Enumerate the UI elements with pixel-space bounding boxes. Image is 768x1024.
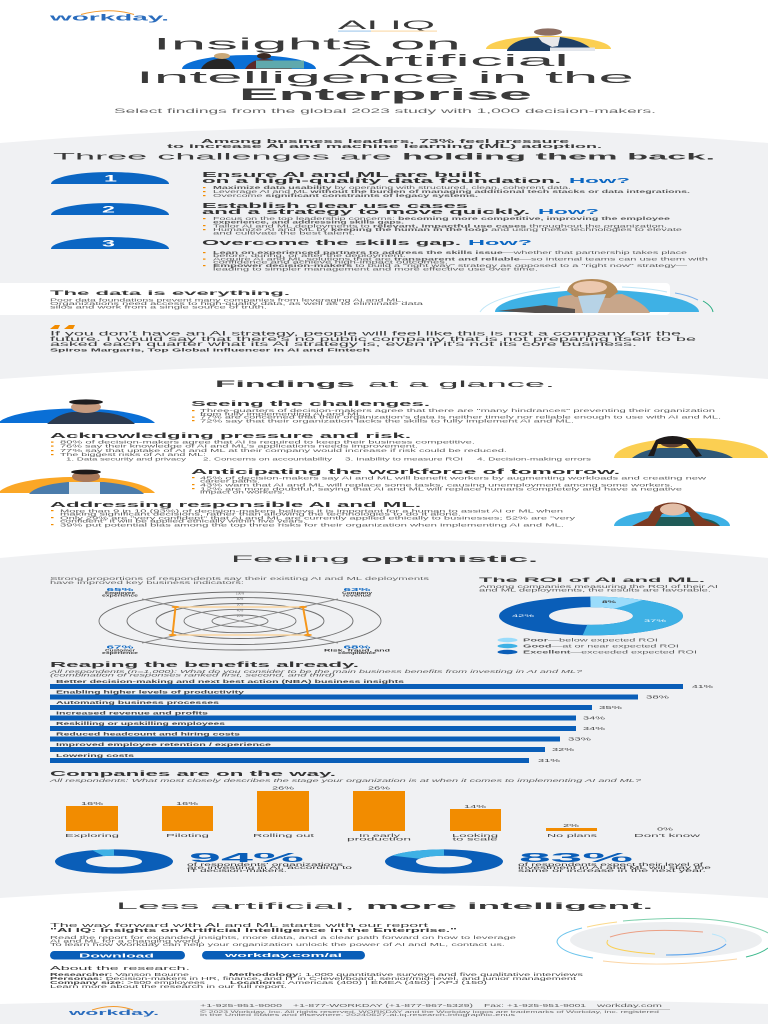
bar: automating processes (50, 700, 622, 710)
legend: ROI: Excellent —exceeded expected ROI (523, 650, 697, 654)
legend: ROI (498, 638, 697, 654)
finding: acknowledging pressure and risk: 77% say that uptake of AI and ML at their company would increase if risk could be reduced. (60, 448, 507, 453)
bar: reduced headcount (50, 732, 591, 742)
photo: red-haired woman on light blue arc (614, 502, 730, 526)
radar chart: 100% (236, 592, 244, 596)
attribution: Spiros Margaris, Top Global Influencer in AI and Fintech (50, 348, 371, 352)
column chart: implementation stage: Exploring (65, 833, 120, 838)
legend: ROI: Good —at or near expected ROI (523, 644, 679, 648)
body text: data foundations: Organizations need access to high-quality data, as well as to eliminate data (50, 301, 425, 306)
heading: reaping the benefits: (combination of responses ranked first, second, and third) (50, 672, 336, 678)
finding: seeing the challenges (191, 401, 721, 423)
finding: anticipating the workforce: 45% of decision-makers say AI and ML will benefit workers by augmenting workloads and creating new (200, 475, 708, 480)
bar: automating processes: Automating business processes (56, 700, 220, 705)
bar: higher productivity: Enabling higher levels of productivity (56, 690, 245, 694)
photo: man in denim on orange arc (0, 470, 155, 494)
column chart: implementation stage: No plans (547, 833, 599, 838)
stat: 94 percent: of respondents' organizations (187, 862, 343, 867)
bar: revenue and profits: Increased revenue and profits (56, 710, 209, 716)
challenge 2: and cultivate the best talent. (213, 230, 355, 236)
panel: the data is everything (0, 279, 713, 315)
bar: employee retention (50, 742, 574, 752)
radar chart: 20% (237, 614, 243, 618)
stat: 94 percent: are investing in AI, according to (187, 865, 354, 870)
heading: findings at a glance: at a glance. (368, 379, 555, 390)
radar label: customer experience: experience (102, 651, 138, 655)
finding: anticipating the workforce: impact on workers. (200, 490, 285, 495)
bar: reduced headcount: Reduced headcount and hiring costs (56, 732, 241, 736)
finding: anticipating the workforce (191, 469, 708, 495)
column chart: implementation stage: In early (359, 833, 402, 838)
challenge 3: confidence and achieve high-impact outcomes. (213, 260, 448, 264)
ROI heading and text (479, 577, 718, 592)
about the research: About the research. (50, 966, 190, 972)
about the research: Locations: Americas (400) | EMEA (450) | APJ (150) (230, 980, 488, 985)
photo: woman with tablet on blue arc with rings (480, 279, 713, 313)
heading: companies are on the way (47, 771, 643, 783)
photo: man with crossed arms on blue arc (0, 399, 155, 424)
badge 1: 1 (104, 174, 117, 184)
quote text (50, 332, 698, 348)
footer contact line: +1-877-WORKDAY (+1-877-967-5329) (293, 1003, 474, 1008)
intro statement (167, 139, 604, 150)
stat: 94 percent (187, 850, 354, 873)
radar label: employee experience: 65% (106, 587, 134, 592)
heading: findings at a glance (215, 379, 555, 390)
footer legal text: © 2023 Workday, Inc. All rights reserved. WORKDAY and the Workday logos are trademarks of Workday, Inc. registered (200, 1010, 659, 1014)
finding: addressing responsible AI: Only 29% are "very confident" that AI and ML are currently applied ethically to businesses; 52% are "very (60, 515, 577, 520)
donut: 94 percent (70, 853, 158, 870)
challenge 3: How? (468, 238, 534, 247)
bar: revenue and profits (50, 710, 605, 720)
bar: employee retention: Improved employee retention / experience (56, 742, 272, 747)
footer contact line: +1-925-951-9000 (200, 1003, 284, 1008)
finding: seeing the challenges: 77% are concerned that their organization's data is neither timely nor reliable enough to use with AI and ML. (200, 415, 721, 420)
photo: woman with braids on yellow arc (614, 436, 768, 458)
finding: acknowledging pressure and risk (50, 433, 591, 462)
finding: acknowledging pressure and risk: 80% of decision-makers agree that AI is required to keep their business competitive. (60, 440, 475, 444)
challenge 1: Ensure AI and ML are built (202, 170, 483, 179)
bar chart: benefits (50, 679, 713, 763)
finding: acknowledging pressure and risk: 3. Inability to measure ROI (345, 456, 463, 462)
finding: acknowledging pressure and risk: 1. Data security and privacy (66, 456, 188, 462)
quote text: future. I would say that there's no public company that is not preparing itself to be (50, 337, 698, 343)
button: workday.com/ai (202, 951, 365, 960)
finding: acknowledging pressure and risk: 2. Concerns on accountability (203, 456, 334, 462)
button: workday.com/ai: workday.com/ai (222, 953, 343, 959)
body text: data foundations (50, 298, 425, 309)
radar chart: 80% (237, 597, 243, 601)
bar: reskilling: Reskilling or upskilling employees (56, 721, 226, 726)
radar label: risk fraud compliance: compliance (338, 651, 376, 655)
title block (136, 18, 634, 104)
legend: ROI: Poor —below expected ROI (523, 638, 658, 642)
column chart: implementation stage: 26% (272, 786, 294, 790)
about the research: Learn more about the research in our full report. (50, 984, 287, 989)
body text: data foundations: silos and work from a single source of truth. (50, 304, 267, 309)
button: download: Download (79, 953, 154, 959)
intro statement: Among business leaders, 73% feel pressure (201, 139, 569, 145)
subtitle: Select findings from the global 2023 study with 1,000 decision-makers. (114, 108, 657, 115)
column chart: implementation stage: to scale (452, 836, 499, 842)
heading: reaping the benefits (47, 662, 584, 678)
challenge 2: and a strategy to move quickly. (202, 207, 530, 216)
heading: the data is everything: The data is everything. (50, 290, 290, 297)
challenge 2: Tailor AI and ML deployments to relevant, impactful use cases throughout the organization. (213, 224, 667, 228)
radar label: customer experience: 67% (106, 644, 134, 650)
finding: addressing responsible AI (50, 502, 577, 528)
quote text: asked each quarter what its AI strategy is, even if it's not its core business. (50, 342, 638, 348)
donut chart: ROI (512, 599, 667, 630)
column chart: implementation stage: 16% (81, 801, 103, 806)
call to action text: The way forward with AI and ML starts with our report (50, 923, 430, 929)
logo: workday (47, 11, 169, 24)
call to action text: "AI IQ: Insights on Artificial Intelligence in the Enterprise." (50, 928, 458, 934)
title block: Intelligence in the (136, 69, 634, 87)
title block: Enterprise (239, 86, 532, 104)
radar label: employee experience: Employee (105, 591, 135, 595)
column chart: implementation stage: 2% (563, 823, 579, 828)
photo: man with tablet on yellow arc (486, 28, 611, 51)
radar chart (99, 587, 390, 655)
heading: companies are on the way: Companies are on the way. (50, 771, 336, 778)
heading: reaping the benefits: Reaping the benefits already. (50, 662, 359, 669)
radar label: risk fraud compliance: 68% (344, 644, 371, 650)
bar: reduced headcount: 33% (568, 736, 591, 742)
call to action text: To learn how Workday can help your organization unlock the power of AI and ML, contact us. (50, 942, 505, 947)
button: download (50, 951, 185, 960)
challenge 3: before, during, or after the deployment. (213, 253, 406, 258)
heading: companies are on the way: All respondents: What most closely describes the stage your organization is at when it comes to implementing AI and ML? (47, 778, 643, 783)
bar: higher productivity: 38% (646, 694, 669, 700)
column chart: implementation stage: Don't know (634, 833, 702, 838)
radar label: employee experience (102, 587, 138, 598)
bar: lowering costs (50, 753, 560, 763)
heading: feeling optimistic: Feeling (231, 554, 350, 565)
donut chart: ROI: 8% (602, 599, 617, 604)
donut chart: ROI: 37% (644, 618, 667, 623)
title block: Insights on (153, 36, 461, 54)
stat: 83 percent: 83% (519, 850, 635, 865)
column chart: implementation stage: production (347, 836, 412, 842)
footer contact line: Fax: +1-925-951-9001 (484, 1003, 587, 1008)
call to action text: AI and ML for a changing world. (50, 938, 203, 943)
bar: higher productivity (50, 690, 669, 700)
radar label: customer experience (102, 644, 138, 655)
column chart: implementation stage: 0% (657, 826, 673, 832)
challenge 2 (202, 201, 684, 236)
challenge 2: How? (538, 207, 600, 216)
challenge 3: Acquire AI and ML solutions that are transparent and reliable —so internal teams can use them with (213, 256, 710, 262)
heading: three challenges: Three challenges are (53, 152, 392, 162)
challenge 1: How? (569, 176, 631, 185)
finding: addressing responsible AI: More than 9 in 10 (93%) of decision-makers believe it is important for a human to assist AI or ML when (60, 508, 565, 513)
ROI heading and text: and ML deployments, the results are favorable. (479, 587, 711, 592)
bar: employee retention: 32% (552, 747, 574, 752)
challenge 2: experience, and addressing skills gaps. (213, 220, 404, 224)
bar: better decision-making (50, 679, 713, 689)
challenge 1: Overcome significant constraints of legacy systems. (213, 193, 478, 198)
bar: revenue and profits: 34% (583, 716, 605, 720)
challenge 2: Establish clear use cases (202, 201, 468, 210)
heading: less artificial more intelligent (116, 901, 653, 912)
stat: 83 percent: same or increase in the next year. (518, 868, 706, 873)
bar: better decision-making: Better decision-making and next best action (NBA) business insights (56, 679, 405, 684)
call to action text (50, 923, 518, 947)
logo: workday: workday. (47, 12, 169, 24)
photo: two colleagues with laptop on blue arc (182, 53, 316, 69)
bar: lowering costs: 31% (538, 758, 560, 763)
footer contact line: workday.com (597, 1003, 663, 1008)
finding: seeing the challenges: Seeing the challenges. (191, 401, 430, 408)
column chart: implementation stage: Looking (452, 833, 499, 838)
heading: feeling optimistic: optimistic. (361, 554, 538, 565)
radar label: customer experience: Customer (105, 648, 136, 652)
radar chart: 60% (237, 602, 243, 606)
radar chart intro text: Strong proportions of respondents say their existing AI and ML deployments (50, 576, 430, 582)
challenge 3: leading to simpler management and more effective use over time. (213, 266, 538, 272)
radar label: risk fraud compliance (324, 644, 390, 655)
column chart: implementation stage: Rolling out (253, 833, 316, 838)
quote (50, 325, 698, 352)
badge 1 (51, 172, 169, 184)
donut: 83 percent (400, 853, 488, 870)
finding: acknowledging pressure and risk: Acknowledging pressure and risk. (50, 433, 411, 440)
heading: findings at a glance: Findings (215, 379, 355, 390)
stat: 83 percent: investment in AI and ML will stay the (518, 865, 713, 870)
stat: 83 percent: of respondents expect their level of (518, 862, 705, 867)
stat: 94 percent: 94% (189, 850, 306, 865)
finding: seeing the challenges: Three-quarters of decision-makers agree that there are "many hindrances" preventing their organization (200, 408, 717, 413)
radar label: company revenue: Company (342, 591, 372, 595)
finding: seeing the challenges: from fully implementing AI and ML. (200, 411, 365, 416)
challenge 3: Lean on experienced partners to address the skills issue —whether that partnership takes place (213, 250, 688, 255)
challenge 1: Maximize data usability by operating with structured, clean, coherent data. (213, 185, 571, 190)
heading: three challenges (53, 152, 715, 162)
body text: data foundations: Poor data foundations prevent many companies from leveraging AI and ML. (50, 298, 404, 303)
bar: reskilling: 34% (583, 726, 605, 731)
heading: reaping the benefits: All respondents (n=1,000): What do you consider to be the main business benefits from investing in AI and ML? (47, 669, 584, 674)
challenge 1 (202, 170, 690, 198)
column chart: implementation stage (65, 786, 702, 842)
radar chart intro text: have improved key business indicators: (50, 580, 244, 586)
challenge 2: Humanize AI and ML by keeping the human in the loop and using these technologies to elevate (213, 227, 684, 232)
stat: 83 percent (518, 850, 713, 873)
finding: acknowledging pressure and risk: 76% say their knowledge of AI and ML's applications needs improvement. (60, 444, 418, 448)
radar chart: 40% (237, 608, 243, 612)
column chart: implementation stage: 26% (368, 786, 390, 790)
finding: anticipating the workforce: Anticipating the workforce of tomorrow. (191, 469, 620, 476)
radar label: company revenue: 63% (344, 587, 371, 592)
finding: anticipating the workforce: career paths. (200, 479, 260, 484)
badge 3: 3 (102, 238, 115, 248)
about the research: Researcher: Vanson Bourne (50, 972, 191, 977)
heading: feeling optimistic (231, 554, 538, 565)
badge 3 (51, 237, 169, 249)
graphic: concentric coloured rings (557, 918, 768, 964)
about the research: Methodology: 1,000 quantitative surveys and five qualitative interviews (229, 972, 583, 977)
bar: reskilling (50, 721, 605, 731)
intro statement: to increase AI and machine learning (ML) adoption. (167, 144, 604, 150)
heading: less artificial more intelligent: Less artificial, (116, 901, 355, 912)
finding: addressing responsible AI: confident" it will be applied ethically within five years. (60, 519, 306, 524)
finding: addressing responsible AI: making significant decisions, rather than allowing the technologies to do it alone. (60, 512, 461, 517)
about the research: Company size: >500 employees (50, 980, 205, 985)
title block: Artificial (338, 52, 569, 70)
challenge 1: on a high-quality data foundation. (202, 176, 561, 185)
column chart: implementation stage: Piloting (166, 833, 210, 838)
challenge 3: Overcome the skills gap. (202, 238, 461, 247)
finding: addressing responsible AI: Addressing responsible AI and ML. (50, 502, 421, 509)
finding: acknowledging pressure and risk: The biggest risks of AI and ML: (60, 452, 206, 457)
ROI heading and text: Among companies measuring the ROI of their AI (479, 584, 718, 589)
quote text: If you don't have an AI strategy, people will feel like this is not a company for the (50, 332, 683, 338)
finding: addressing responsible AI: 39% put potential bias among the top three risks for their organization when implementing AI and ML. (60, 522, 564, 528)
ROI heading and text: The ROI of AI and ML. (479, 577, 705, 584)
radar label: employee experience: experience (102, 594, 138, 598)
heading: three challenges: holding them back. (402, 152, 715, 162)
challenge 3 (202, 238, 710, 272)
footer legal text: in the United States and elsewhere. 20240627-ai-iq-research-infographic-enus (200, 1013, 516, 1017)
heading: less artificial more intelligent: more intelligent. (366, 901, 653, 912)
finding: acknowledging pressure and risk: 4. Decision-making errors (477, 456, 591, 462)
finding: anticipating the workforce: 43% warn that AI and ML will replace some tasks, causing unemployment among some workers. (200, 482, 673, 487)
challenge 1: Leverage AI and ML without the burden of managing additional tech stacks or data integrations. (213, 189, 690, 194)
column chart: implementation stage: 14% (464, 804, 486, 809)
challenge 2: Focus on the top leadership concerns: becoming more competitive, improving the employee (213, 216, 671, 221)
footer contact line (200, 1003, 670, 1010)
call to action text: Read the report for expanded insights, more data, and a clear path forward on how to leverage (50, 935, 518, 940)
footer legal text (200, 1010, 659, 1017)
radar label: risk fraud compliance: Risk, fraud, and (324, 648, 390, 652)
challenge 3: Empower decision-makers to build a "right way" strategy as opposed to a "right now" strategy— (213, 263, 689, 268)
footer logo: workday. (66, 1008, 159, 1017)
icon: orange quote marks (50, 325, 75, 329)
finding: seeing the challenges: 72% say that their organization lacks the skills to fully implement AI and ML. (200, 418, 574, 423)
stat: 94 percent: IT decision-makers. (187, 868, 287, 873)
title block: AI IQ (338, 18, 435, 32)
radar label: company revenue (342, 587, 372, 598)
about the research (50, 966, 583, 989)
donut chart: ROI: 42% (512, 613, 535, 618)
badge 2: 2 (102, 204, 115, 214)
bar: automating processes: 35% (599, 705, 622, 710)
radar label: company revenue: revenue (343, 594, 371, 598)
bar: better decision-making: 41% (692, 684, 713, 689)
bar: lowering costs: Lowering costs (56, 753, 135, 758)
footer logo (66, 1006, 159, 1017)
finding: anticipating the workforce: 12% are more doubtful, saying that AI and ML will replace humans completely and have a negative (200, 486, 684, 491)
about the research: Personas: Decision-makers in HR, finance, and IT in C-level/board, senior/mid-level, and junior management (50, 976, 578, 981)
radar chart intro text (50, 576, 430, 586)
badge 2 (51, 203, 169, 215)
column chart: implementation stage: 16% (176, 801, 198, 806)
